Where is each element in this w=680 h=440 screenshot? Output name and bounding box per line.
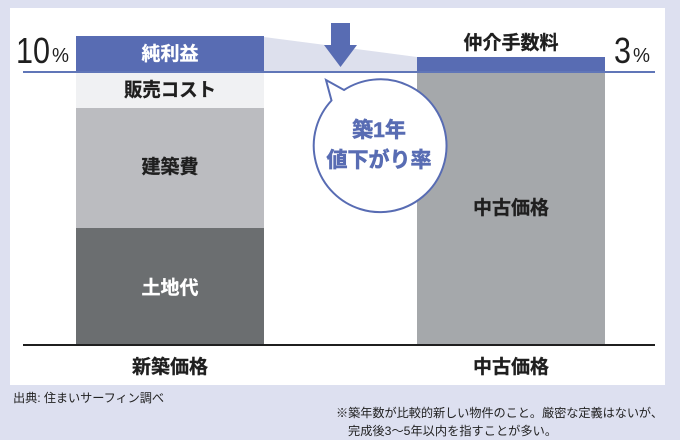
segment: net profit bbox=[76, 36, 264, 72]
callout: first-year depreciation rate bbox=[314, 79, 447, 212]
segment: resale price: 中古価格 bbox=[473, 197, 549, 219]
footnote bbox=[336, 405, 663, 438]
axis label: new-build price: 新築価格 bbox=[132, 355, 208, 378]
segment: land cost bbox=[76, 228, 264, 345]
segment: brokerage fee bbox=[417, 57, 605, 72]
axis label: resale price: 中古価格 bbox=[473, 356, 549, 378]
segment: land cost: 土地代 bbox=[141, 277, 199, 299]
segment: net profit: 純利益 bbox=[141, 43, 199, 65]
label: 10 percent: 10 bbox=[16, 30, 50, 71]
segment: sales cost bbox=[76, 72, 264, 108]
icon: down arrow bbox=[324, 23, 357, 67]
footnote: ※築年数が比較的新しい物件のこと。厳密な定義はないが、 bbox=[336, 405, 663, 420]
segment: construction cost bbox=[76, 108, 264, 228]
line: price level bbox=[23, 71, 655, 73]
bar: new-build price bbox=[76, 36, 264, 345]
segment: sales cost: 販売コスト bbox=[124, 79, 216, 101]
segment: construction cost: 建築費 bbox=[141, 155, 199, 178]
callout: first-year depreciation rate: 築1年 bbox=[352, 119, 406, 142]
segment: resale price bbox=[417, 72, 605, 345]
baseline bbox=[23, 344, 655, 346]
decline wedge bbox=[264, 37, 417, 72]
label: brokerage fee: 仲介手数料 bbox=[463, 32, 559, 54]
callout: first-year depreciation rate: 値下がり率 bbox=[326, 148, 432, 172]
bar: resale price bbox=[417, 57, 605, 345]
label: 3 percent: 3 bbox=[614, 30, 631, 71]
footnote: 完成後3〜5年以内を指すことが多い。 bbox=[348, 423, 557, 438]
label: 3 percent bbox=[614, 30, 650, 71]
source: 出典: 住まいサーフィン調べ bbox=[13, 391, 164, 405]
label: 3 percent: % bbox=[633, 45, 650, 67]
label: 10 percent: % bbox=[52, 45, 69, 67]
